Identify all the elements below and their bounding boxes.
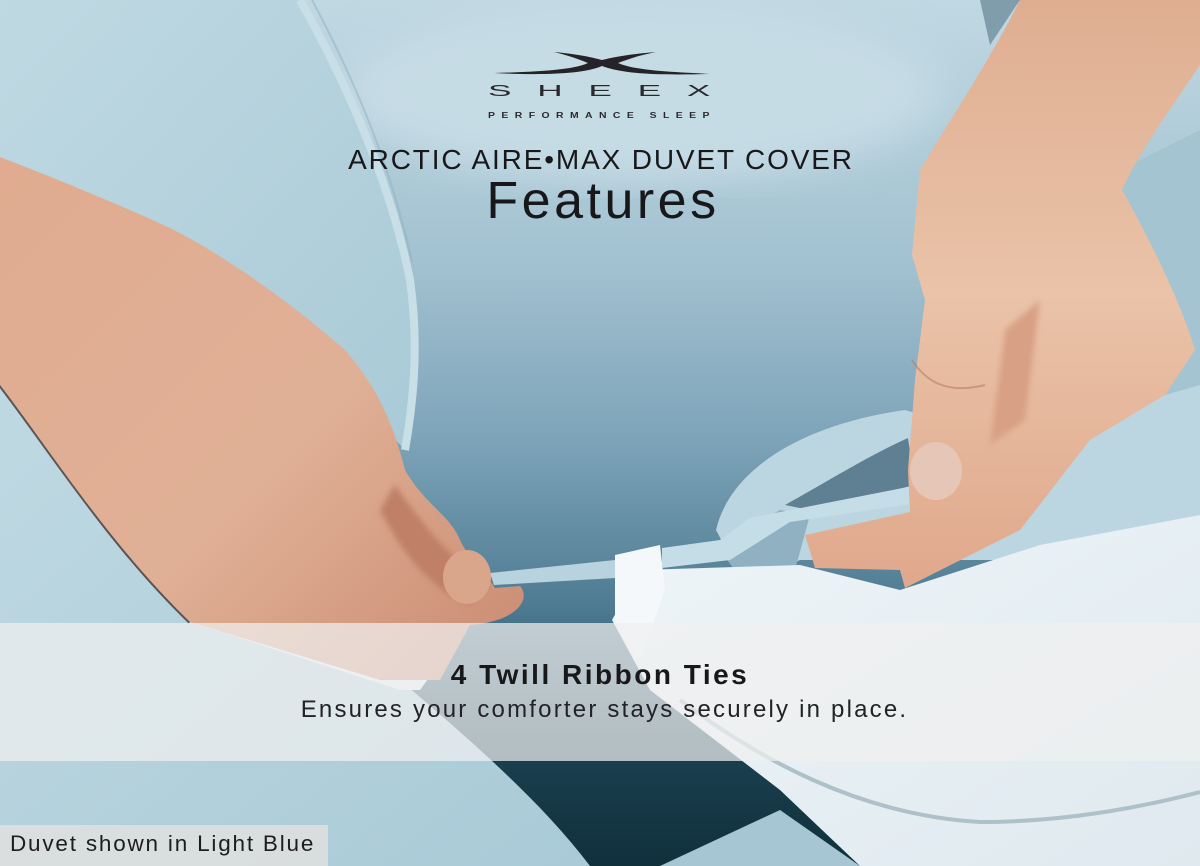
caption band	[0, 623, 1200, 761]
bottom blue cloth	[660, 810, 860, 866]
right blue cuff	[716, 385, 1200, 585]
right hand	[805, 0, 1200, 588]
left duvet lower	[0, 385, 590, 866]
left duvet fold upper	[0, 0, 415, 450]
color note text: Duvet shown in Light Blue	[10, 831, 315, 856]
logo mark	[494, 52, 710, 74]
logo: Sheex	[488, 52, 736, 120]
color note label	[0, 825, 328, 866]
right upper fabric	[1000, 130, 1200, 560]
subtitle: ARCTIC AIRE•MAX DUVET COVER	[348, 144, 854, 175]
title: Features	[486, 172, 720, 230]
left hand	[0, 157, 524, 680]
ribbon	[490, 485, 918, 585]
white pillow	[612, 515, 1200, 866]
feature heading: 4 Twill Ribbon Ties	[451, 659, 749, 690]
logo tagline: PERFORMANCE SLEEP	[488, 111, 716, 120]
white duvet under band	[190, 622, 470, 690]
feature description: Ensures your comforter stays securely in place.	[301, 696, 908, 723]
logo wordmark: SHEEX	[488, 83, 736, 100]
